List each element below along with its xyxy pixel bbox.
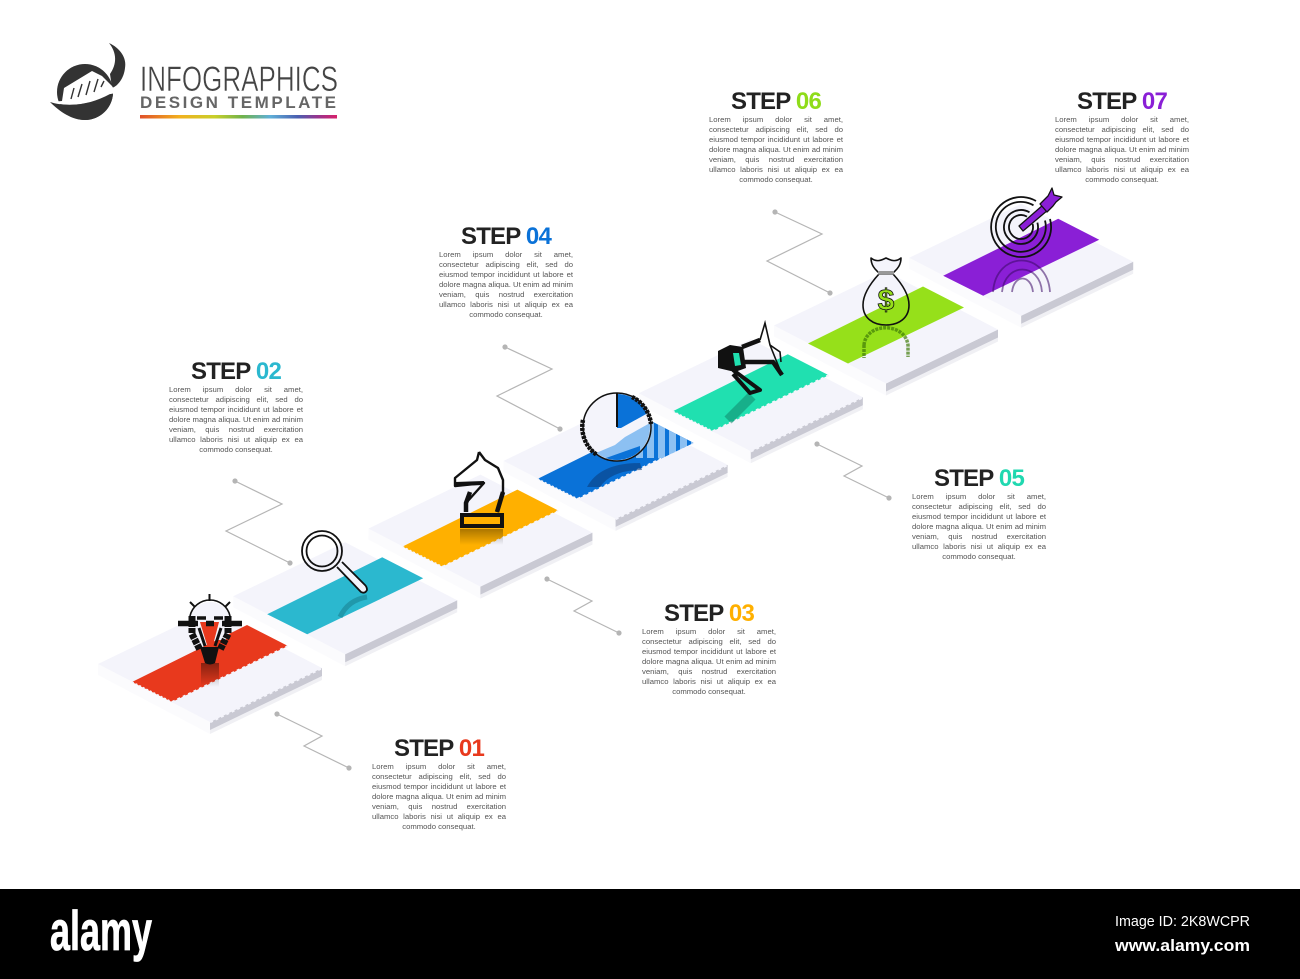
text block: step 02: veniam, quis nostrud exercitation <box>169 425 303 434</box>
text block: step 04: dolore magna aliqua. Ut enim ad minim <box>439 280 573 289</box>
text block: step 01: consectetur adipiscing elit, sed do <box>372 772 506 781</box>
icon: magnifier <box>302 531 367 617</box>
text block: step 02: dolore magna aliqua. Ut enim ad minim <box>169 415 303 424</box>
footer band <box>0 889 1300 979</box>
text block: step 03: STEP 03 <box>664 600 754 627</box>
text block: step 07: STEP 07 <box>1077 88 1167 115</box>
text block: step 06: ullamco laboris nisi ut aliquip ex ea <box>709 165 843 174</box>
connector: step 01 <box>275 712 351 770</box>
text block: step 07: ullamco laboris nisi ut aliquip ex ea <box>1055 165 1189 174</box>
text block: step 07: dolore magna aliqua. Ut enim ad minim <box>1055 145 1189 154</box>
text block: step 02: commodo consequat. <box>199 445 273 454</box>
text block: step 03: dolore magna aliqua. Ut enim ad minim <box>642 657 776 666</box>
text block: step 06: commodo consequat. <box>739 175 813 184</box>
text block: step 05: STEP 05 <box>934 465 1024 492</box>
text block: step 04 <box>439 223 574 319</box>
text block: step 04: commodo consequat. <box>469 310 543 319</box>
plate: step 04 <box>504 407 728 531</box>
text block: step 06: veniam, quis nostrud exercitation <box>709 155 843 164</box>
connector: step 05 <box>815 442 891 500</box>
text block: step 03: eiusmod tempor incididunt ut labore et <box>642 647 776 656</box>
text block: step 07: veniam, quis nostrud exercitation <box>1055 155 1189 164</box>
text block: step 07: consectetur adipiscing elit, sed do <box>1055 125 1189 134</box>
text block: step 06: consectetur adipiscing elit, sed do <box>709 125 843 134</box>
text block: step 03: Lorem ipsum dolor sit amet, <box>642 627 776 636</box>
plate: step 03 <box>368 475 592 599</box>
text block: step 04: consectetur adipiscing elit, sed do <box>439 260 573 269</box>
text block: step 03: veniam, quis nostrud exercitation <box>642 667 776 676</box>
text block: step 02: eiusmod tempor incididunt ut labore et <box>169 405 303 414</box>
text block: step 01: commodo consequat. <box>402 822 476 831</box>
text block: step 01 <box>372 735 506 831</box>
text block: step 02: STEP 02 <box>191 358 281 385</box>
text block: step 06: Lorem ipsum dolor sit amet, <box>709 115 843 124</box>
icon: money bag: $ <box>878 284 895 317</box>
icon: light bulb <box>178 594 242 687</box>
text block: step 03 <box>642 600 776 696</box>
text block: step 07: commodo consequat. <box>1085 175 1159 184</box>
text block: step 07 <box>1055 88 1190 184</box>
text block: step 05: dolore magna aliqua. Ut enim ad minim <box>912 522 1046 531</box>
text block: step 05: eiusmod tempor incididunt ut labore et <box>912 512 1046 521</box>
text block: step 06: eiusmod tempor incididunt ut labore et <box>709 135 843 144</box>
text block: step 05: Lorem ipsum dolor sit amet, <box>912 492 1046 501</box>
text block: step 02: ullamco laboris nisi ut aliquip ex ea <box>169 435 303 444</box>
connector: step 04 <box>497 345 562 431</box>
icon: chess knight <box>455 452 503 545</box>
footer image id: Image ID: 2K8WCPR <box>1115 913 1250 930</box>
text block: step 04: STEP 04 <box>461 223 551 250</box>
rainbow bar <box>140 115 337 118</box>
connector: step 06 <box>767 210 832 295</box>
text block: step 01: Lorem ipsum dolor sit amet, <box>372 762 506 771</box>
text block: step 05: veniam, quis nostrud exercitation <box>912 532 1046 541</box>
plate: step 05 <box>639 339 863 463</box>
text block: step 05: ullamco laboris nisi ut aliquip ex ea <box>912 542 1046 551</box>
plate: step 07 <box>909 204 1133 328</box>
clock reflection <box>587 463 642 487</box>
text block: step 06: STEP 06 <box>731 88 821 115</box>
icon: money bag <box>863 258 909 358</box>
text block: step 06: dolore magna aliqua. Ut enim ad minim <box>709 145 843 154</box>
text block: step 01: STEP 01 <box>394 735 484 762</box>
icon: megaphone <box>718 323 782 420</box>
logo title: INFOGRAPHICS <box>140 60 338 99</box>
text block: step 01: veniam, quis nostrud exercitation <box>372 802 506 811</box>
text block: step 05: commodo consequat. <box>942 552 1016 561</box>
icon: clock <box>582 393 696 487</box>
text block: step 01: ullamco laboris nisi ut aliquip ex ea <box>372 812 506 821</box>
plate: step 06 <box>774 272 998 396</box>
text block: step 07: Lorem ipsum dolor sit amet, <box>1055 115 1189 124</box>
text block: step 01: eiusmod tempor incididunt ut labore et <box>372 782 506 791</box>
logo <box>50 43 338 120</box>
text block: step 05 <box>912 465 1046 561</box>
plate: step 02 <box>233 542 457 666</box>
light stripes across the blue bar <box>636 422 694 458</box>
text block: step 02 <box>169 358 304 454</box>
text block: step 06 <box>709 88 844 184</box>
logo subtitle: DESIGN TEMPLATE <box>140 93 336 112</box>
text block: step 04: ullamco laboris nisi ut aliquip ex ea <box>439 300 573 309</box>
icon: target <box>991 188 1062 292</box>
text block: step 02: consectetur adipiscing elit, sed do <box>169 395 303 404</box>
connector: step 03 <box>545 577 621 635</box>
logo mark <box>50 43 125 120</box>
text block: step 03: commodo consequat. <box>672 687 746 696</box>
text block: step 02: Lorem ipsum dolor sit amet, <box>169 385 303 394</box>
text block: step 07: eiusmod tempor incididunt ut labore et <box>1055 135 1189 144</box>
text block: step 03: ullamco laboris nisi ut aliquip ex ea <box>642 677 776 686</box>
text block: step 04: eiusmod tempor incididunt ut labore et <box>439 270 573 279</box>
text block: step 04: Lorem ipsum dolor sit amet, <box>439 250 573 259</box>
text block: step 04: veniam, quis nostrud exercitation <box>439 290 573 299</box>
text block: step 01: dolore magna aliqua. Ut enim ad minim <box>372 792 506 801</box>
text block: step 03: consectetur adipiscing elit, sed do <box>642 637 776 646</box>
connector: step 02 <box>226 479 292 565</box>
footer url: www.alamy.com <box>1114 936 1250 955</box>
plate: step 01 <box>98 610 322 734</box>
footer logo: alamy <box>50 899 152 962</box>
text block: step 05: consectetur adipiscing elit, sed do <box>912 502 1046 511</box>
